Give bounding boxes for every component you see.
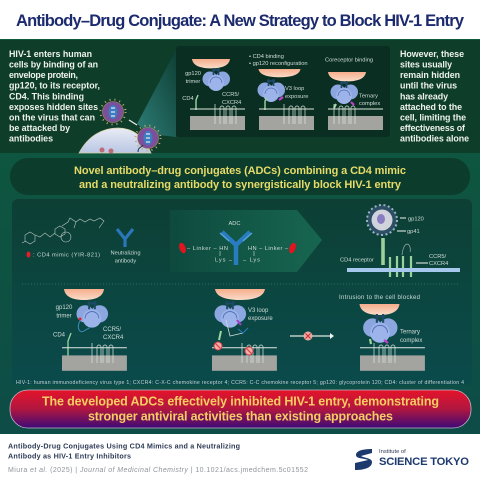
- diagram: virus on CD4 receptor: [340, 205, 460, 277]
- text: limits of antibodies: until the virus: [400, 80, 457, 90]
- bottom step 1: ADC approach: gp120: [56, 305, 73, 311]
- step 1: gp120 trimer and receptors: CXCR4: [222, 100, 241, 106]
- chemical structure: CD4 mimic: [22, 218, 104, 244]
- conclusion banner: stronger antiviral activities than existing approaches: [88, 410, 393, 424]
- bottom step 1: ADC approach: trimer: [56, 314, 72, 320]
- bottom step 3: ternary complex: [339, 295, 425, 371]
- logo: Institute of Science Tokyo: Institute of: [379, 449, 406, 455]
- text: limits of antibodies: However, these: [400, 49, 464, 59]
- diagram: virus on CD4 receptor: CXCR4: [429, 261, 448, 267]
- icon: neutralizing antibody: Neutralizing: [110, 250, 141, 256]
- text: HIV entry explanation: CD4. This binding: [9, 92, 84, 102]
- ADC arrow panel: HN – Linker –: [248, 246, 289, 252]
- step 1: gp120 trimer and receptors: gp120: [185, 71, 201, 77]
- ADC arrow panel: Lys –: [215, 258, 233, 264]
- icon: neutralizing antibody: antibody: [115, 258, 136, 264]
- bottom step 3: ternary complex: Ternary: [400, 330, 420, 336]
- step 2: CD4 binding: V3 loop: [285, 86, 304, 92]
- panel: binding steps: [176, 46, 390, 137]
- headline: novel ADCs: [10, 158, 470, 195]
- text: limits of antibodies: antibodies alone: [400, 134, 469, 144]
- divider: [22, 283, 460, 285]
- text: HIV entry explanation: [9, 49, 100, 144]
- bottom step 2: V3 exposure blocked: V3 loop: [248, 308, 269, 314]
- text: limits of antibodies: sites usually: [400, 60, 452, 70]
- text: limits of antibodies: effectiveness of: [400, 123, 465, 133]
- diagram: virus on CD4 receptor: CD4 receptor: [340, 258, 374, 264]
- bottom step 1: ADC approach: CXCR4: [103, 335, 124, 341]
- text: HIV entry explanation: antibodies: [9, 134, 53, 144]
- title: Antibody–Drug Conjugate: A New Strategy to Block HIV-1 Entry: [16, 12, 465, 30]
- footer: citation: Antibody as HIV-1 Entry Inhibitors: [8, 452, 131, 460]
- bottom step 2: V3 exposure blocked: [212, 289, 277, 371]
- step 2: CD4 binding: [249, 54, 314, 130]
- footnote: abbreviations: HIV-1: human immunodeficiency virus type 1; CXCR4: C-X-C chemokine receptor 4; CCR5: C-C chemokine receptor 5; gp120: glycoprotein 120; CD4: cluster of differentiation 4: [16, 380, 464, 386]
- zoom beam: [137, 50, 176, 137]
- text: HIV entry explanation: HIV-1 enters human: [9, 49, 92, 59]
- arrow: entry blocked: [290, 332, 334, 340]
- step 2: CD4 binding: exposure: [285, 94, 308, 100]
- CD4 mimic label: : CD4 mimic (YIR-821): [33, 252, 100, 258]
- step 3: coreceptor binding: Ternary: [359, 94, 378, 100]
- icon: neutralizing antibody: [110, 229, 141, 264]
- text: limits of antibodies: attached to the: [400, 102, 462, 112]
- step 1: gp120 trimer and receptors: [182, 59, 245, 130]
- diagram: virus on CD4 receptor: CCR5/: [429, 254, 446, 260]
- text: limits of antibodies: has already: [400, 92, 448, 102]
- step 1: gp120 trimer and receptors: CD4: [182, 96, 194, 102]
- diagram: virus on CD4 receptor: gp120: [408, 216, 424, 222]
- text: HIV entry explanation: be attacked by: [9, 123, 70, 133]
- ADC arrow panel: [170, 210, 322, 272]
- text: HIV entry explanation: gp120, to its receptor,: [9, 80, 100, 90]
- panel: ADC design and mechanism: [12, 199, 472, 386]
- text: limits of antibodies: remain hidden: [400, 70, 460, 80]
- conclusion banner: [10, 390, 471, 428]
- conclusion banner: The developed ADCs effectively inhibited HIV-1 entry, demonstrating: [42, 394, 439, 408]
- step 2: CD4 binding: • gp120 reconfiguration: [249, 61, 308, 67]
- footer: citation: [8, 442, 308, 474]
- icon: host cell with viruses: [79, 100, 160, 154]
- panel: HIV entry background: [0, 40, 480, 154]
- text: HIV entry explanation: envelope protein,: [9, 70, 78, 80]
- text: limits of antibodies: [400, 49, 469, 144]
- icon: blocked CD4: [214, 342, 222, 350]
- bottom step 2: V3 exposure blocked: exposure: [248, 316, 273, 322]
- headline: novel ADCs: and a neutralizing antibody to synergistically block HIV-1 entry: [79, 179, 402, 191]
- bottom step 3: ternary complex: Intrusion to the cell blocked: [339, 295, 420, 301]
- bottom step 1: ADC approach: CCR5/: [103, 327, 121, 333]
- footer: citation: Antibody-Drug Conjugates Using CD4 Mimics and a Neutralizing: [8, 442, 240, 450]
- text: HIV entry explanation: exposes hidden sites: [9, 102, 98, 112]
- text: HIV entry explanation: on the virus that can: [9, 112, 95, 122]
- bottom step 3: ternary complex: complex: [400, 338, 422, 344]
- footer: citation: Miura et al. (2025) | Journal of Medicinal Chemistry | 10.1021/acs.jmedchem.5c01552: [8, 467, 308, 474]
- logo: Institute of Science Tokyo: [355, 449, 469, 470]
- headline: novel ADCs: Novel antibody–drug conjugates (ADCs) combining a CD4 mimic: [74, 165, 406, 177]
- ADC arrow panel: – Linker – HN: [187, 246, 228, 252]
- step 2: CD4 binding: • CD4 binding: [249, 54, 284, 60]
- step 3: coreceptor binding: Coreceptor binding: [325, 58, 373, 64]
- icon: blocked coreceptor: [245, 347, 253, 355]
- ADC arrow panel: ADC: [228, 221, 241, 227]
- step 1: gp120 trimer and receptors: CCR5/: [222, 92, 239, 98]
- text: HIV entry explanation: cells by binding of an: [9, 60, 98, 70]
- diagram: virus on CD4 receptor: gp41: [407, 229, 420, 235]
- ADC arrow panel: – Lys: [243, 258, 260, 264]
- step 3: coreceptor binding: [325, 58, 383, 130]
- logo: Institute of Science Tokyo: SCIENCE TOKYO: [379, 456, 469, 468]
- step 3: coreceptor binding: complex: [359, 101, 380, 107]
- text: limits of antibodies: cell, limiting the: [400, 112, 466, 122]
- bottom step 1: ADC approach: [53, 289, 127, 371]
- step 1: gp120 trimer and receptors: trimer: [186, 79, 200, 85]
- bottom step 1: ADC approach: CD4: [53, 332, 66, 338]
